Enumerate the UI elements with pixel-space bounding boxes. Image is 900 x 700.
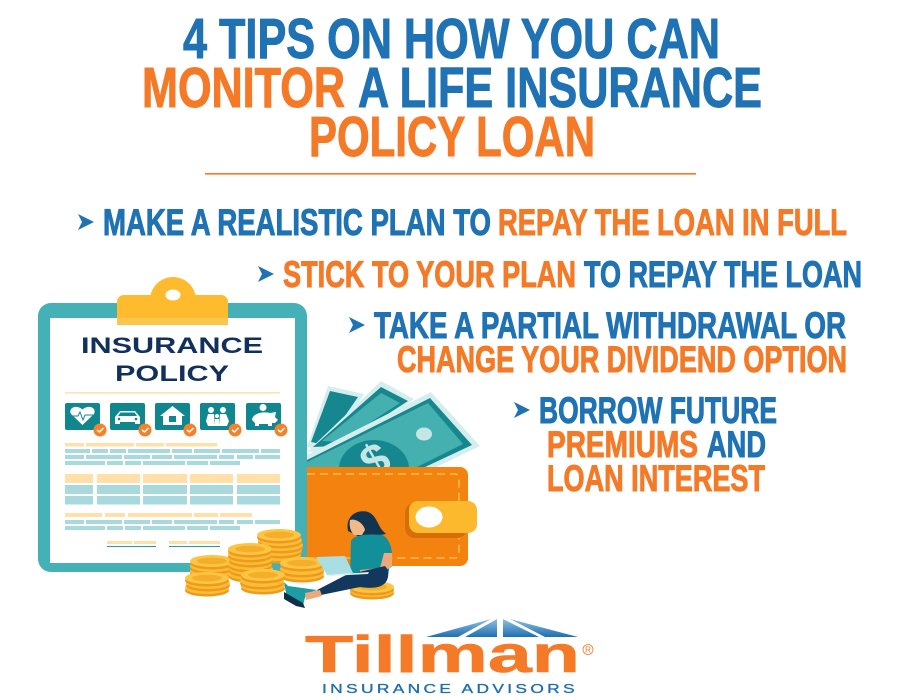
title: POLICY LOAN <box>309 105 595 169</box>
orange check badges <box>94 424 288 436</box>
tip 4: borrow future premiums <box>514 389 777 499</box>
logo: Tillman Insurance Advisors <box>305 619 593 696</box>
tip 4: borrow future premiums: BORROW FUTURE <box>539 389 777 431</box>
illustration: gold coin stacks <box>185 529 394 600</box>
title: A LIFE INSURANCE <box>358 56 762 120</box>
tip 1: repay in full <box>78 201 847 243</box>
title: 4 TIPS ON HOW YOU CAN <box>183 7 720 71</box>
tip 3: partial withdrawal or dividend option <box>349 304 847 380</box>
coverage icons <box>65 403 288 436</box>
tip 2: stick to your plan: STICK TO YOUR PLAN <box>283 253 576 295</box>
logo roof <box>426 619 578 637</box>
logo: Tillman Insurance Advisors: Tillman <box>305 626 580 684</box>
tip 1: repay in full: MAKE A REALISTIC PLAN TO <box>103 201 491 243</box>
illustration: wallet <box>307 467 477 566</box>
title <box>142 7 762 169</box>
title: MONITOR <box>142 56 345 120</box>
tip 4: borrow future premiums: LOAN INTEREST <box>547 457 765 499</box>
document heading: INSURANCE <box>81 333 263 358</box>
illustration: clipboard insurance policy <box>38 277 307 572</box>
document text lines and table <box>65 443 280 547</box>
illustration: woman with laptop <box>284 511 392 608</box>
illustration: money bills <box>307 381 480 498</box>
logo: Tillman Insurance Advisors: INSURANCE ADVISORS <box>322 681 578 696</box>
clipboard clip <box>117 277 228 325</box>
tip 2: stick to your plan <box>258 253 862 295</box>
document heading: POLICY <box>115 361 229 386</box>
tip 4: borrow future premiums: AND <box>707 423 766 465</box>
logo: Tillman Insurance Advisors: R <box>585 646 591 654</box>
illustration: money bills: $ <box>351 431 399 489</box>
document heading <box>81 333 263 386</box>
tip 4: borrow future premiums: PREMIUMS <box>547 423 698 465</box>
